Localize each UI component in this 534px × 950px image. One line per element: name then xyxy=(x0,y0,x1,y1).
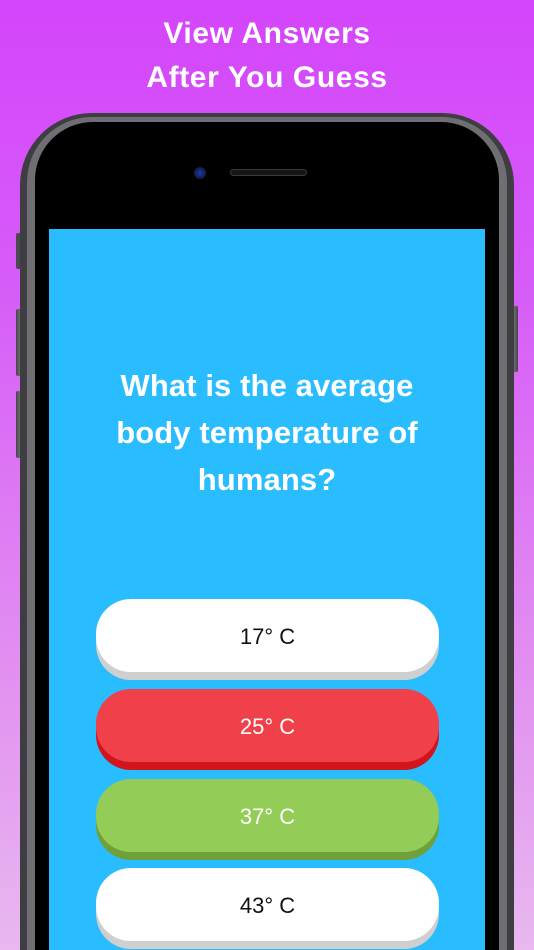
answer: 17 C: 17° C xyxy=(240,624,295,649)
metal band xyxy=(27,117,507,950)
side buttons left: mute xyxy=(16,233,21,269)
answer: 37 C correct: 37° C xyxy=(240,804,295,829)
answer: 43 C: 43° C xyxy=(240,893,295,918)
side buttons left: volume down xyxy=(16,391,21,458)
title: View Answers xyxy=(163,17,371,50)
answer: 25 C wrong xyxy=(96,689,439,762)
question: What is the average xyxy=(120,368,414,403)
answer: 17 C xyxy=(96,599,439,672)
title xyxy=(146,17,388,94)
question: body temperature of xyxy=(116,415,418,450)
answer: 43 C xyxy=(96,868,439,941)
question xyxy=(116,368,418,497)
side button right: power xyxy=(513,306,518,372)
answer: 25 C wrong: 25° C xyxy=(240,714,295,739)
question: humans? xyxy=(198,462,336,497)
answer: 37 C correct xyxy=(96,779,439,852)
speaker xyxy=(230,169,307,176)
camera xyxy=(194,167,206,179)
side buttons left: volume up xyxy=(16,309,21,376)
screen xyxy=(49,229,485,950)
black front glass xyxy=(35,122,499,950)
title: After You Guess xyxy=(146,61,388,94)
